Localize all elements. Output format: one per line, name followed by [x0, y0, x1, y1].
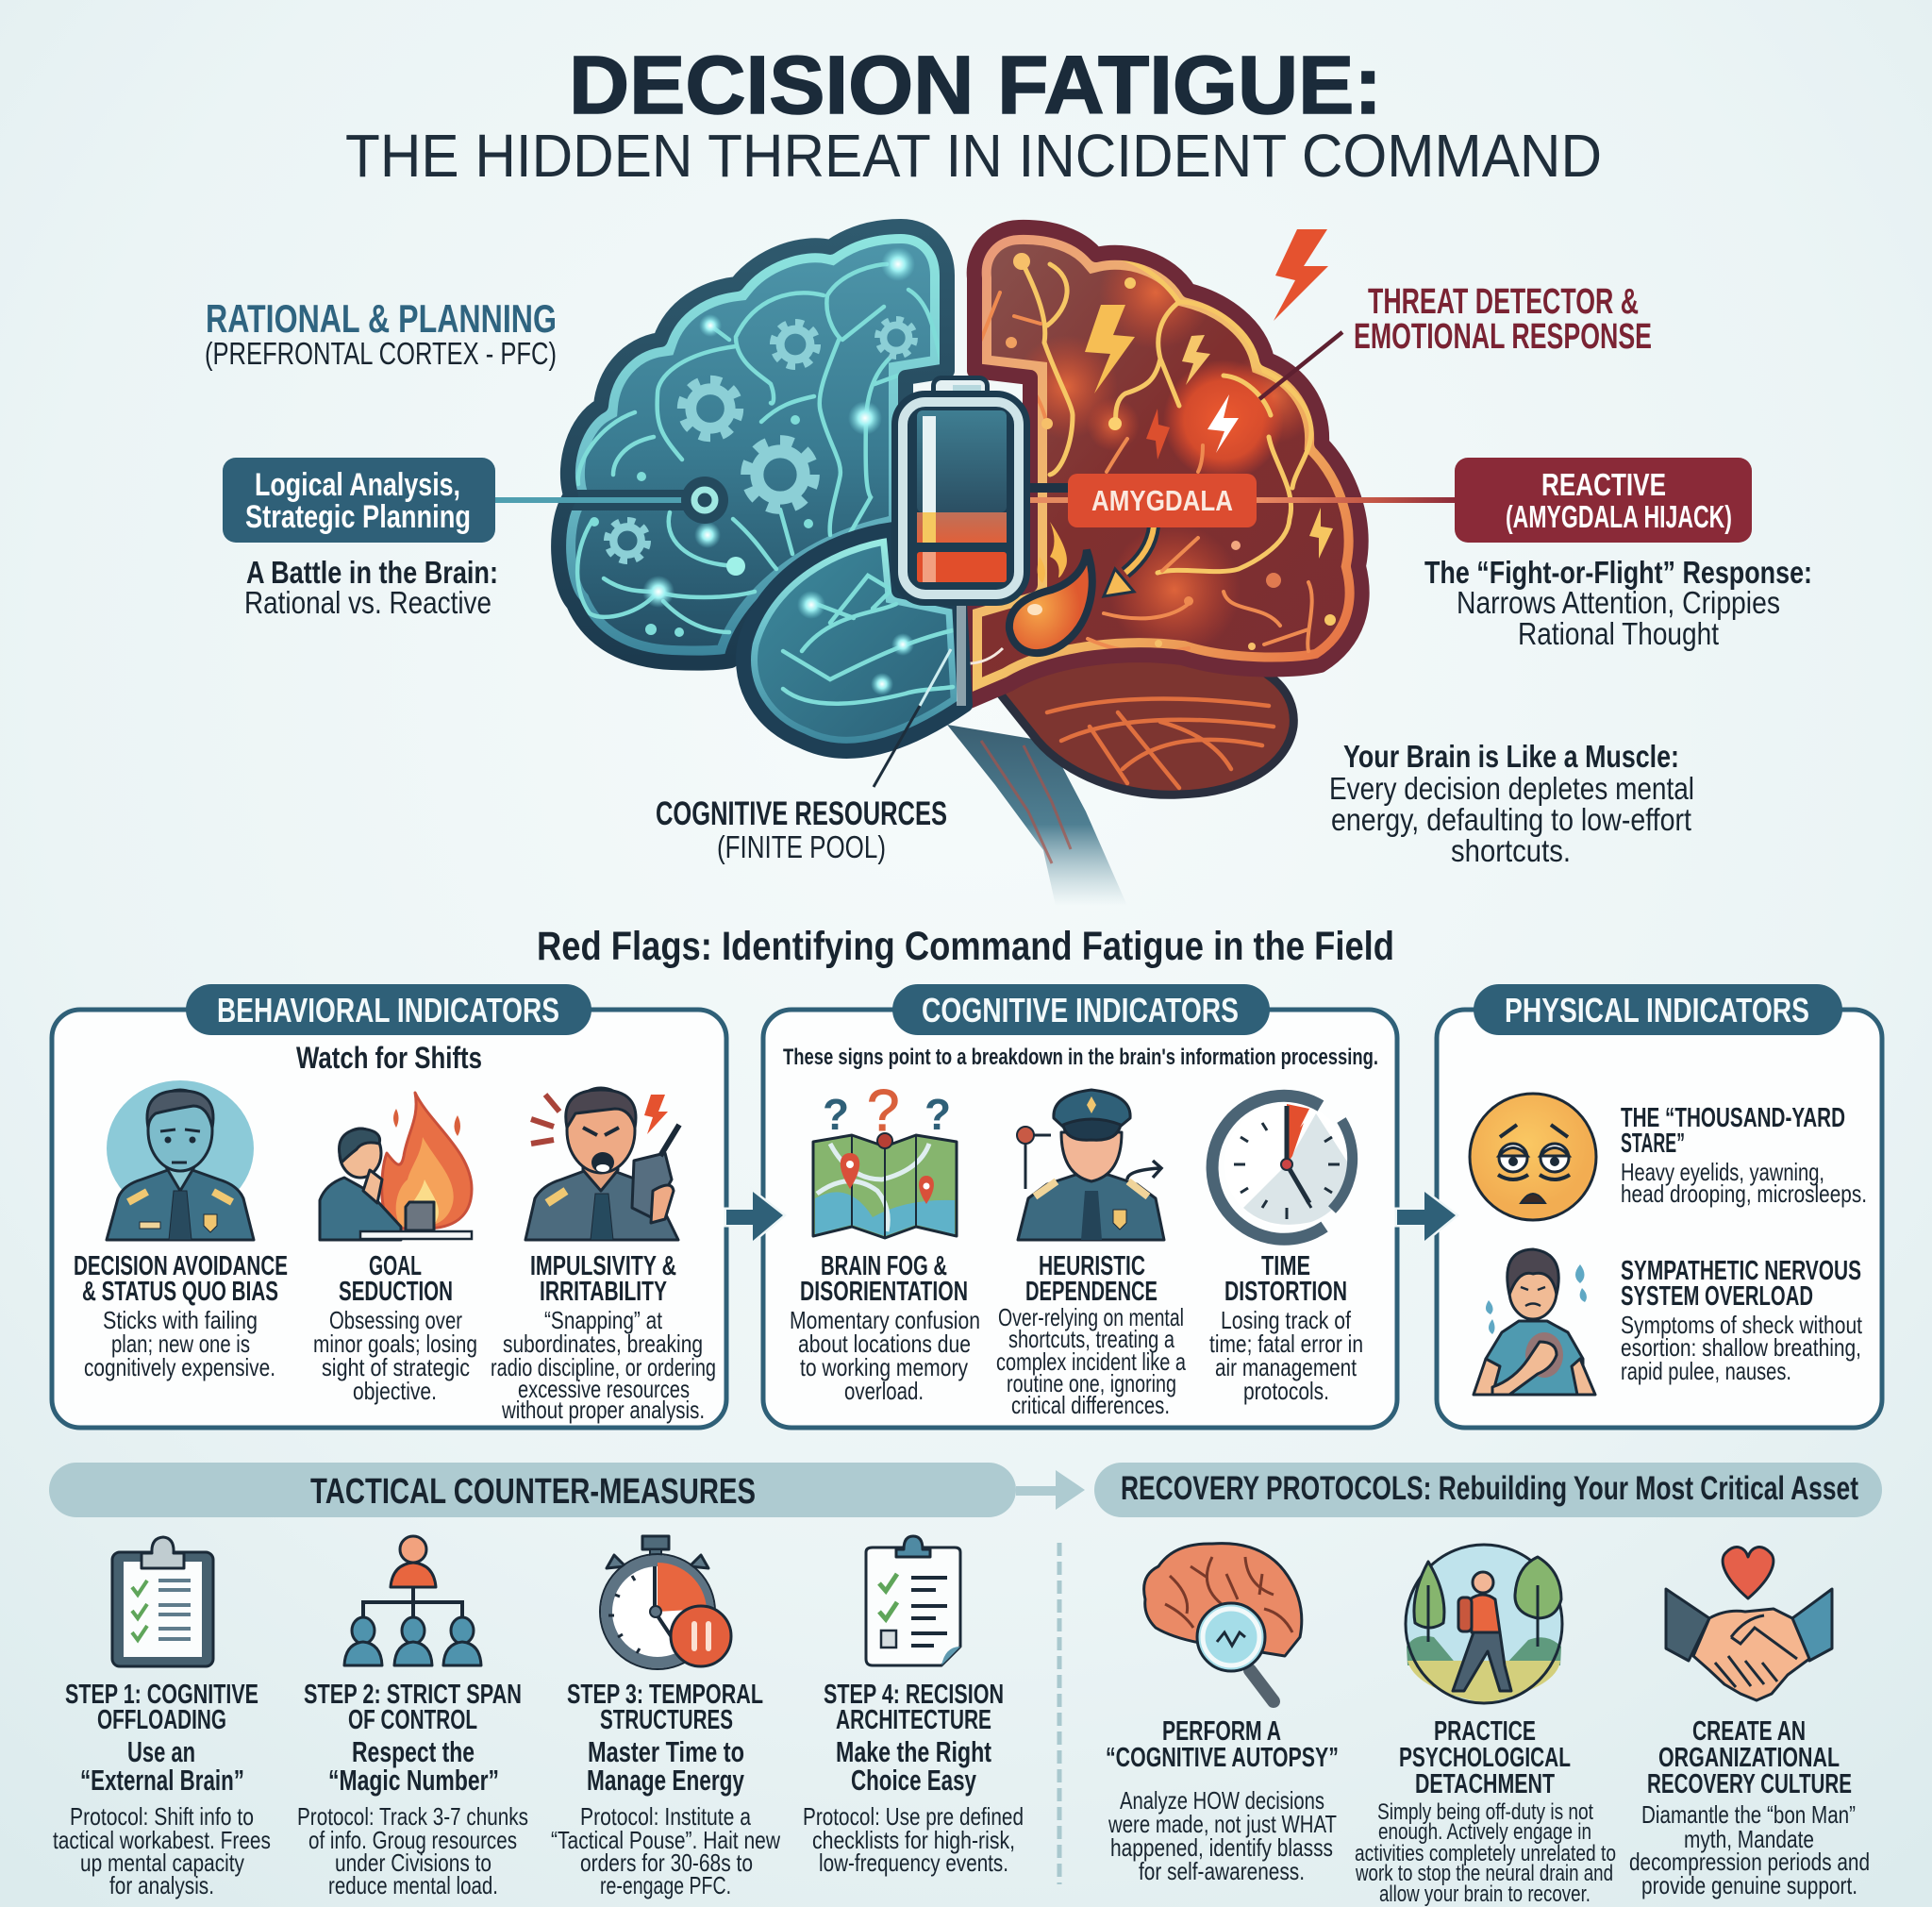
text: ARCHITECTURE	[836, 1705, 991, 1735]
item text: thousand-yard stare: STARE”	[1621, 1129, 1685, 1159]
icon: officer with cap	[1017, 1090, 1164, 1240]
text: activities completely unrelated to	[1355, 1841, 1616, 1866]
text: STEP 4: RECISION	[824, 1680, 1004, 1710]
item text: heuristic dependence: complex incident like a	[996, 1347, 1186, 1376]
text: STEP 1: COGNITIVE	[65, 1680, 258, 1710]
text: Respect the	[352, 1735, 475, 1768]
item text: impulsivity: excessive resources	[518, 1375, 690, 1403]
subheading: These signs point to a breakdown in the brain's information processing.	[783, 1045, 1378, 1070]
item text: heuristic dependence	[996, 1251, 1186, 1419]
text: up mental capacity	[80, 1848, 244, 1877]
title: DECISION FATIGUE:	[569, 40, 1382, 131]
text: “Tactical Pouse”. Hait new	[551, 1826, 780, 1854]
text	[1629, 1716, 1870, 1899]
threat lightning bolt	[1274, 229, 1328, 321]
label: cognitive resources	[656, 795, 947, 864]
text: were made, not just WHAT	[1108, 1810, 1337, 1838]
text: re-engage PFC.	[600, 1871, 731, 1899]
item text: brain fog: BRAIN FOG &	[821, 1251, 947, 1281]
text: “COGNITIVE AUTOPSY”	[1106, 1743, 1339, 1773]
item text: time distortion: air management	[1215, 1353, 1357, 1381]
item text: heuristic dependence: routine one, ignoring	[1007, 1369, 1176, 1397]
text: of info. Groug resources	[308, 1826, 517, 1854]
item text: brain fog: DISORIENTATION	[800, 1277, 968, 1307]
item text: heuristic dependence: critical differences.	[1011, 1391, 1170, 1419]
text: Simply being off-duty is not	[1377, 1799, 1593, 1825]
text: allow your brain to recover.	[1379, 1882, 1591, 1907]
item text: impulsivity: without proper analysis.	[501, 1396, 705, 1424]
text: Master Time to	[588, 1735, 744, 1768]
panel: physical indicators	[1437, 984, 1882, 1428]
icon: clipboard	[112, 1537, 213, 1666]
label: threat detector: EMOTIONAL RESPONSE	[1354, 317, 1652, 357]
text: checklists for high-risk,	[812, 1826, 1015, 1854]
arrow: behavioral to cognitive	[726, 1192, 783, 1241]
icon: distorted clock	[1212, 1096, 1353, 1239]
item text: sympathetic overload: rapid pulee, nauses.	[1621, 1357, 1791, 1385]
text: work to stop the neural drain and	[1355, 1861, 1613, 1886]
icon: stopwatch with pause	[600, 1536, 731, 1669]
label: rational and planning	[205, 296, 557, 371]
step 4: decision architecture	[803, 1536, 1024, 1877]
pill: logical analysis: Logical Analysis,	[255, 467, 460, 503]
tab: behavioral: BEHAVIORAL INDICATORS	[217, 991, 559, 1029]
connector: cognitive resources pointer	[874, 649, 951, 787]
item text: time distortion	[1209, 1251, 1363, 1405]
item text: impulsivity: radio discipline, or ordering	[491, 1353, 716, 1381]
text: OF CONTROL	[348, 1705, 477, 1735]
text	[803, 1680, 1024, 1877]
text: ORGANIZATIONAL	[1658, 1743, 1840, 1773]
text: Choice Easy	[851, 1764, 977, 1797]
label: cognitive resources: (FINITE POOL)	[717, 829, 886, 864]
item text: brain fog: about locations due	[798, 1330, 971, 1358]
text	[297, 1680, 528, 1899]
icon: heart and handshake	[1666, 1547, 1832, 1700]
text: CREATE AN	[1692, 1716, 1806, 1747]
heading: red flags: Red Flags: Identifying Command Fatigue in the Field	[537, 924, 1394, 969]
panel: behavioral indicators	[52, 984, 726, 1428]
text: battle in the brain: A Battle in the Brain:	[246, 555, 498, 590]
recovery 2: psychological detachment	[1355, 1545, 1616, 1907]
text	[1106, 1716, 1339, 1885]
item text: impulsivity: IMPULSIVITY &	[530, 1251, 676, 1281]
label: rational and planning: (PREFRONTAL CORTEX - PFC)	[205, 336, 557, 371]
item text: sympathetic overload: SYSTEM OVERLOAD	[1621, 1281, 1813, 1312]
text	[551, 1680, 780, 1899]
text: PRACTICE	[1434, 1716, 1536, 1747]
step 1: cognitive offloading	[53, 1537, 271, 1899]
icon: map with question marks: ?	[867, 1079, 899, 1144]
icon: goal seduction	[320, 1093, 472, 1240]
text: Manage Energy	[587, 1764, 745, 1797]
connector: logical to gear node	[495, 477, 728, 524]
right hemisphere	[962, 227, 1362, 703]
item text: goal seduction: Obsessing over	[329, 1306, 462, 1334]
text: “Magic Number”	[328, 1764, 499, 1797]
arrow: cognitive to physical	[1397, 1192, 1456, 1241]
item text: brain fog	[790, 1251, 980, 1405]
item text: thousand-yard stare: head drooping, microsleeps.	[1621, 1179, 1867, 1208]
item text: decision avoidance: Sticks with failing	[103, 1306, 258, 1334]
title: THE HIDDEN THREAT IN INCIDENT COMMAND	[345, 122, 1602, 190]
icon: irritable officer	[525, 1088, 679, 1240]
item text: impulsivity: subordinates, breaking	[503, 1330, 703, 1358]
pill: amygdala: AMYGDALA	[1091, 484, 1233, 517]
text: fight or flight: Rational Thought	[1518, 616, 1719, 651]
tab: cognitive: COGNITIVE INDICATORS	[922, 991, 1239, 1029]
text: Make the Right	[836, 1735, 991, 1768]
panel: cognitive indicators	[763, 984, 1397, 1428]
item text: time distortion: TIME	[1261, 1251, 1310, 1281]
item text: time distortion: time; fatal error in	[1209, 1330, 1363, 1358]
item text: decision avoidance: DECISION AVOIDANCE	[74, 1251, 288, 1281]
text: orders for 30-68s to	[580, 1848, 753, 1877]
text: PERFORM A	[1162, 1716, 1281, 1747]
pill: reactive: (AMYGDALA HIJACK)	[1506, 499, 1732, 534]
cerebellum	[1000, 654, 1293, 795]
text: RECOVERY CULTURE	[1647, 1769, 1852, 1799]
text: brain is like a muscle	[1329, 739, 1694, 868]
icon: brain under magnifier	[1144, 1544, 1302, 1701]
text: “External Brain”	[80, 1764, 244, 1797]
pill: reactive	[1455, 458, 1752, 543]
text: myth, Mandate	[1684, 1825, 1814, 1853]
item text: brain fog: Momentary confusion	[790, 1306, 980, 1334]
text: Protocol: Shift info to	[70, 1802, 254, 1831]
icon: map with question marks: ?	[924, 1090, 951, 1139]
pill: logical analysis	[223, 458, 495, 543]
text	[53, 1680, 271, 1899]
text: reduce mental load.	[328, 1871, 498, 1899]
text: battle in the brain	[244, 555, 498, 620]
text: STEP 3: TEMPORAL	[567, 1680, 763, 1710]
recovery 3: recovery culture	[1629, 1547, 1870, 1899]
connector: threat pointer	[1259, 332, 1342, 399]
temporal lobe	[743, 529, 966, 751]
item text: decision avoidance	[74, 1251, 288, 1381]
brain illustration	[495, 226, 1457, 906]
title	[345, 40, 1602, 190]
text: Protocol: Use pre defined	[803, 1802, 1024, 1831]
item text: time distortion: protocols.	[1243, 1377, 1329, 1405]
recovery 1: cognitive autopsy	[1106, 1544, 1339, 1885]
text: Diamantle the “bon Man”	[1641, 1800, 1856, 1829]
label: threat detector	[1354, 282, 1652, 357]
pill: logical analysis: Strategic Planning	[245, 499, 471, 535]
item text: sympathetic overload: Symptoms of sheck without	[1621, 1311, 1863, 1339]
item text: heuristic dependence: Over-relying on mental	[998, 1303, 1184, 1331]
item text: goal seduction	[313, 1251, 477, 1405]
item text: sympathetic overload: esortion: shallow breathing,	[1621, 1333, 1861, 1362]
item text: decision avoidance: cognitively expensive.	[84, 1353, 275, 1381]
connector: amygdala to reactive	[1030, 488, 1457, 500]
item text: decision avoidance: plan; new one is	[111, 1330, 250, 1358]
tab: physical: PHYSICAL INDICATORS	[1505, 991, 1809, 1029]
item text: brain fog: overload.	[844, 1377, 924, 1405]
icon: person with chest pain	[1474, 1249, 1595, 1395]
item text: impulsivity: IRRITABILITY	[540, 1277, 667, 1307]
step 2: span of control	[297, 1536, 528, 1899]
banner: tactical counter-measures: TACTICAL COUNTER-MEASURES	[310, 1472, 756, 1512]
tab: cognitive	[892, 984, 1270, 1035]
text: brain is like a muscle: energy, defaulting to low-effort	[1331, 802, 1691, 837]
item text: goal seduction: SEDUCTION	[339, 1277, 453, 1307]
item text: goal seduction: GOAL	[369, 1251, 422, 1281]
item text: time distortion: DISTORTION	[1224, 1277, 1347, 1307]
pill: amygdala	[1068, 474, 1257, 527]
item text: sympathetic overload	[1621, 1256, 1863, 1385]
item text: goal seduction: objective.	[353, 1377, 437, 1405]
text: low-frequency events.	[819, 1848, 1008, 1877]
text: Use an	[127, 1735, 195, 1768]
text: provide genuine support.	[1641, 1871, 1857, 1899]
text: enough. Actively engage in	[1378, 1819, 1591, 1845]
item text: heuristic dependence: HEURISTIC	[1039, 1251, 1145, 1281]
item text: thousand-yard stare: THE “THOUSAND-YARD	[1621, 1103, 1845, 1133]
tab: behavioral	[186, 984, 591, 1035]
icon: hiker in landscape	[1406, 1545, 1562, 1703]
item text: thousand-yard stare: Heavy eyelids, yawning,	[1621, 1158, 1824, 1186]
text: for self-awareness.	[1139, 1857, 1305, 1885]
amygdala teardrop and flames	[1009, 522, 1154, 653]
text: tactical workabest. Frees	[53, 1826, 271, 1854]
subheading: Watch for Shifts	[296, 1041, 482, 1075]
item text: brain fog: to working memory	[800, 1353, 968, 1381]
icon: map with question marks	[813, 1079, 957, 1238]
item text: time distortion: Losing track of	[1221, 1306, 1352, 1334]
item text: thousand-yard stare	[1621, 1103, 1867, 1208]
step 3: temporal structures	[551, 1536, 780, 1899]
item text: heuristic dependence: DEPENDENCE	[1025, 1277, 1158, 1307]
text	[1355, 1716, 1616, 1907]
arrow: tactical to recovery	[1016, 1470, 1085, 1510]
text: battle in the brain: Rational vs. Reactive	[244, 585, 491, 620]
battery	[903, 380, 1019, 594]
text: fight or flight	[1424, 555, 1812, 651]
pill: reactive: REACTIVE	[1541, 467, 1666, 502]
icon: org chart	[344, 1536, 481, 1665]
item text: impulsivity	[491, 1251, 716, 1424]
brainstem	[947, 725, 1127, 906]
text: STRUCTURES	[600, 1705, 733, 1735]
item text: goal seduction: minor goals; losing	[313, 1330, 477, 1358]
text: PSYCHOLOGICAL	[1399, 1743, 1571, 1773]
tab: physical	[1474, 984, 1842, 1035]
text: STEP 2: STRICT SPAN	[304, 1680, 522, 1710]
text: decompression periods and	[1629, 1848, 1870, 1876]
text: Analyze HOW decisions	[1120, 1786, 1324, 1815]
text: fight or flight: Narrows Attention, Crippies	[1457, 585, 1780, 620]
icon: map with question marks: ?	[823, 1090, 849, 1139]
text: OFFLOADING	[97, 1705, 226, 1735]
item text: decision avoidance: & STATUS QUO BIAS	[82, 1277, 278, 1307]
text: Protocol: Institute a	[580, 1802, 751, 1831]
text: happened, identify blasss	[1110, 1833, 1333, 1862]
item text: goal seduction: sight of strategic	[322, 1353, 470, 1381]
text: DETACHMENT	[1415, 1769, 1555, 1799]
text: brain is like a muscle: shortcuts.	[1451, 833, 1571, 868]
text: fight or flight: The “Fight-or-Flight” Response:	[1424, 555, 1812, 590]
banner: tactical counter-measures	[49, 1463, 1016, 1517]
item text: impulsivity: “Snapping” at	[544, 1306, 663, 1334]
icon: avoidant officer	[107, 1080, 254, 1240]
text: brain is like a muscle: Your Brain is Like a Muscle:	[1343, 739, 1679, 774]
banner: recovery protocols	[1094, 1463, 1882, 1517]
left hemisphere	[558, 226, 947, 663]
label: rational and planning: RATIONAL & PLANNING	[206, 296, 557, 341]
text: brain is like a muscle: Every decision depletes mental	[1329, 771, 1694, 806]
text: under Civisions to	[335, 1848, 491, 1877]
icon: checklist	[866, 1536, 960, 1665]
label: threat detector: THREAT DETECTOR &	[1368, 282, 1639, 322]
icon: tired face	[1470, 1094, 1596, 1220]
label: cognitive resources: COGNITIVE RESOURCES	[656, 795, 947, 832]
text: for analysis.	[109, 1871, 214, 1899]
item text: heuristic dependence: shortcuts, treating a	[1008, 1325, 1174, 1353]
text: Protocol: Track 3-7 chunks	[297, 1802, 528, 1831]
